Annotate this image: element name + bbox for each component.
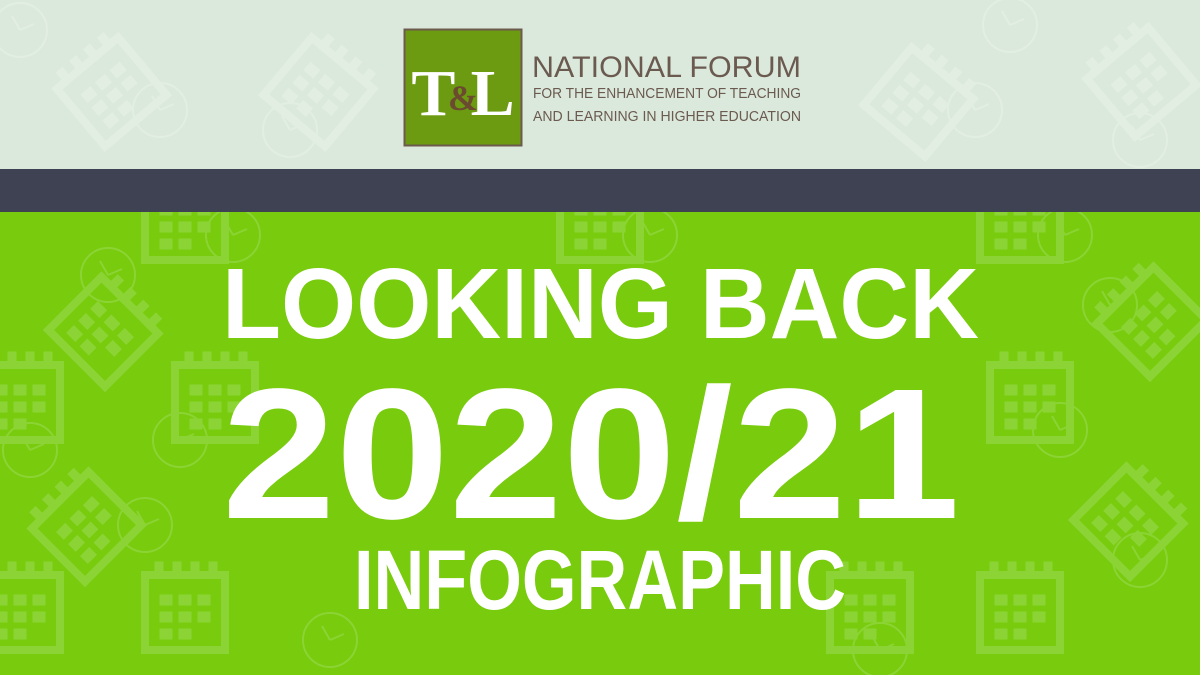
title: looking back: LOOKING BACK: [222, 248, 979, 360]
header background: [0, 0, 1200, 170]
logo: NATIONAL FORUM: [532, 51, 801, 84]
green background: [0, 212, 1200, 675]
logo: AND LEARNING IN HIGHER EDUCATION: [533, 108, 801, 125]
logo: [404, 30, 801, 146]
title: year: 2020/21: [222, 351, 960, 558]
subtitle: infographic: INFOGRAPHIC: [354, 533, 846, 627]
logo: T L: [411, 57, 515, 130]
logo: FOR THE ENHANCEMENT OF TEACHING: [533, 85, 801, 102]
dark band: [0, 169, 1200, 212]
logo: &: [448, 78, 478, 118]
